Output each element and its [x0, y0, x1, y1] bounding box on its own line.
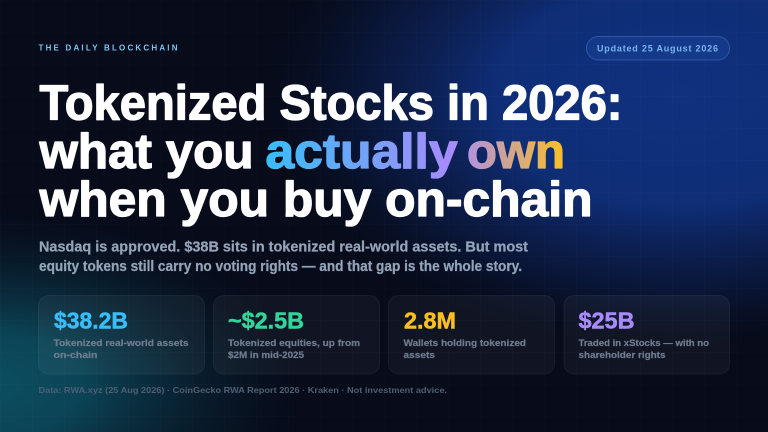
stat card: wallets: Wallets holding tokenized — [404, 338, 526, 348]
publisher label: THE DAILY BLOCKCHAIN — [38, 44, 178, 52]
stat card: tokenized equities — [214, 296, 380, 374]
stat card: real-world assets: $38.2B — [54, 308, 128, 334]
stat card: xStocks: shareholder rights — [578, 350, 666, 360]
title: own — [467, 125, 565, 179]
date badge — [586, 36, 730, 60]
title — [38, 76, 623, 227]
stat card: xStocks: Traded in xStocks — with no — [578, 338, 709, 348]
title: what you — [38, 125, 253, 179]
source note: Data: RWA.xyz (25 Aug 2026) · CoinGecko RWA Report 2026 · Kraken · Not investment advice. — [38, 386, 447, 395]
stat card: real-world assets — [38, 296, 204, 374]
stat card: wallets: assets — [404, 350, 435, 360]
subtitle — [39, 240, 528, 275]
subtitle: equity tokens still carry no voting rights — and that gap is the whole story. — [39, 259, 522, 275]
title: actually — [266, 125, 458, 179]
stat card: xStocks — [564, 296, 730, 374]
stat card: real-world assets: on-chain — [54, 350, 98, 360]
stat card: xStocks: $25B — [578, 308, 634, 334]
title: when you buy on-chain — [38, 173, 593, 227]
date badge: Updated 25 August 2026 — [597, 44, 718, 54]
stat card: tokenized equities: $2M in mid-2025 — [228, 350, 304, 360]
stat card: real-world assets: Tokenized real-world assets — [54, 338, 188, 348]
stat card: tokenized equities: ~$2.5B — [228, 308, 304, 334]
stat card: wallets: 2.8M — [404, 308, 456, 334]
subtitle: Nasdaq is approved. $38B sits in tokenized real-world assets. But most — [39, 240, 528, 256]
title: Tokenized Stocks in 2026: — [40, 76, 622, 130]
stat card: tokenized equities: Tokenized equities, up from — [228, 338, 360, 348]
stat card: wallets — [388, 296, 554, 374]
